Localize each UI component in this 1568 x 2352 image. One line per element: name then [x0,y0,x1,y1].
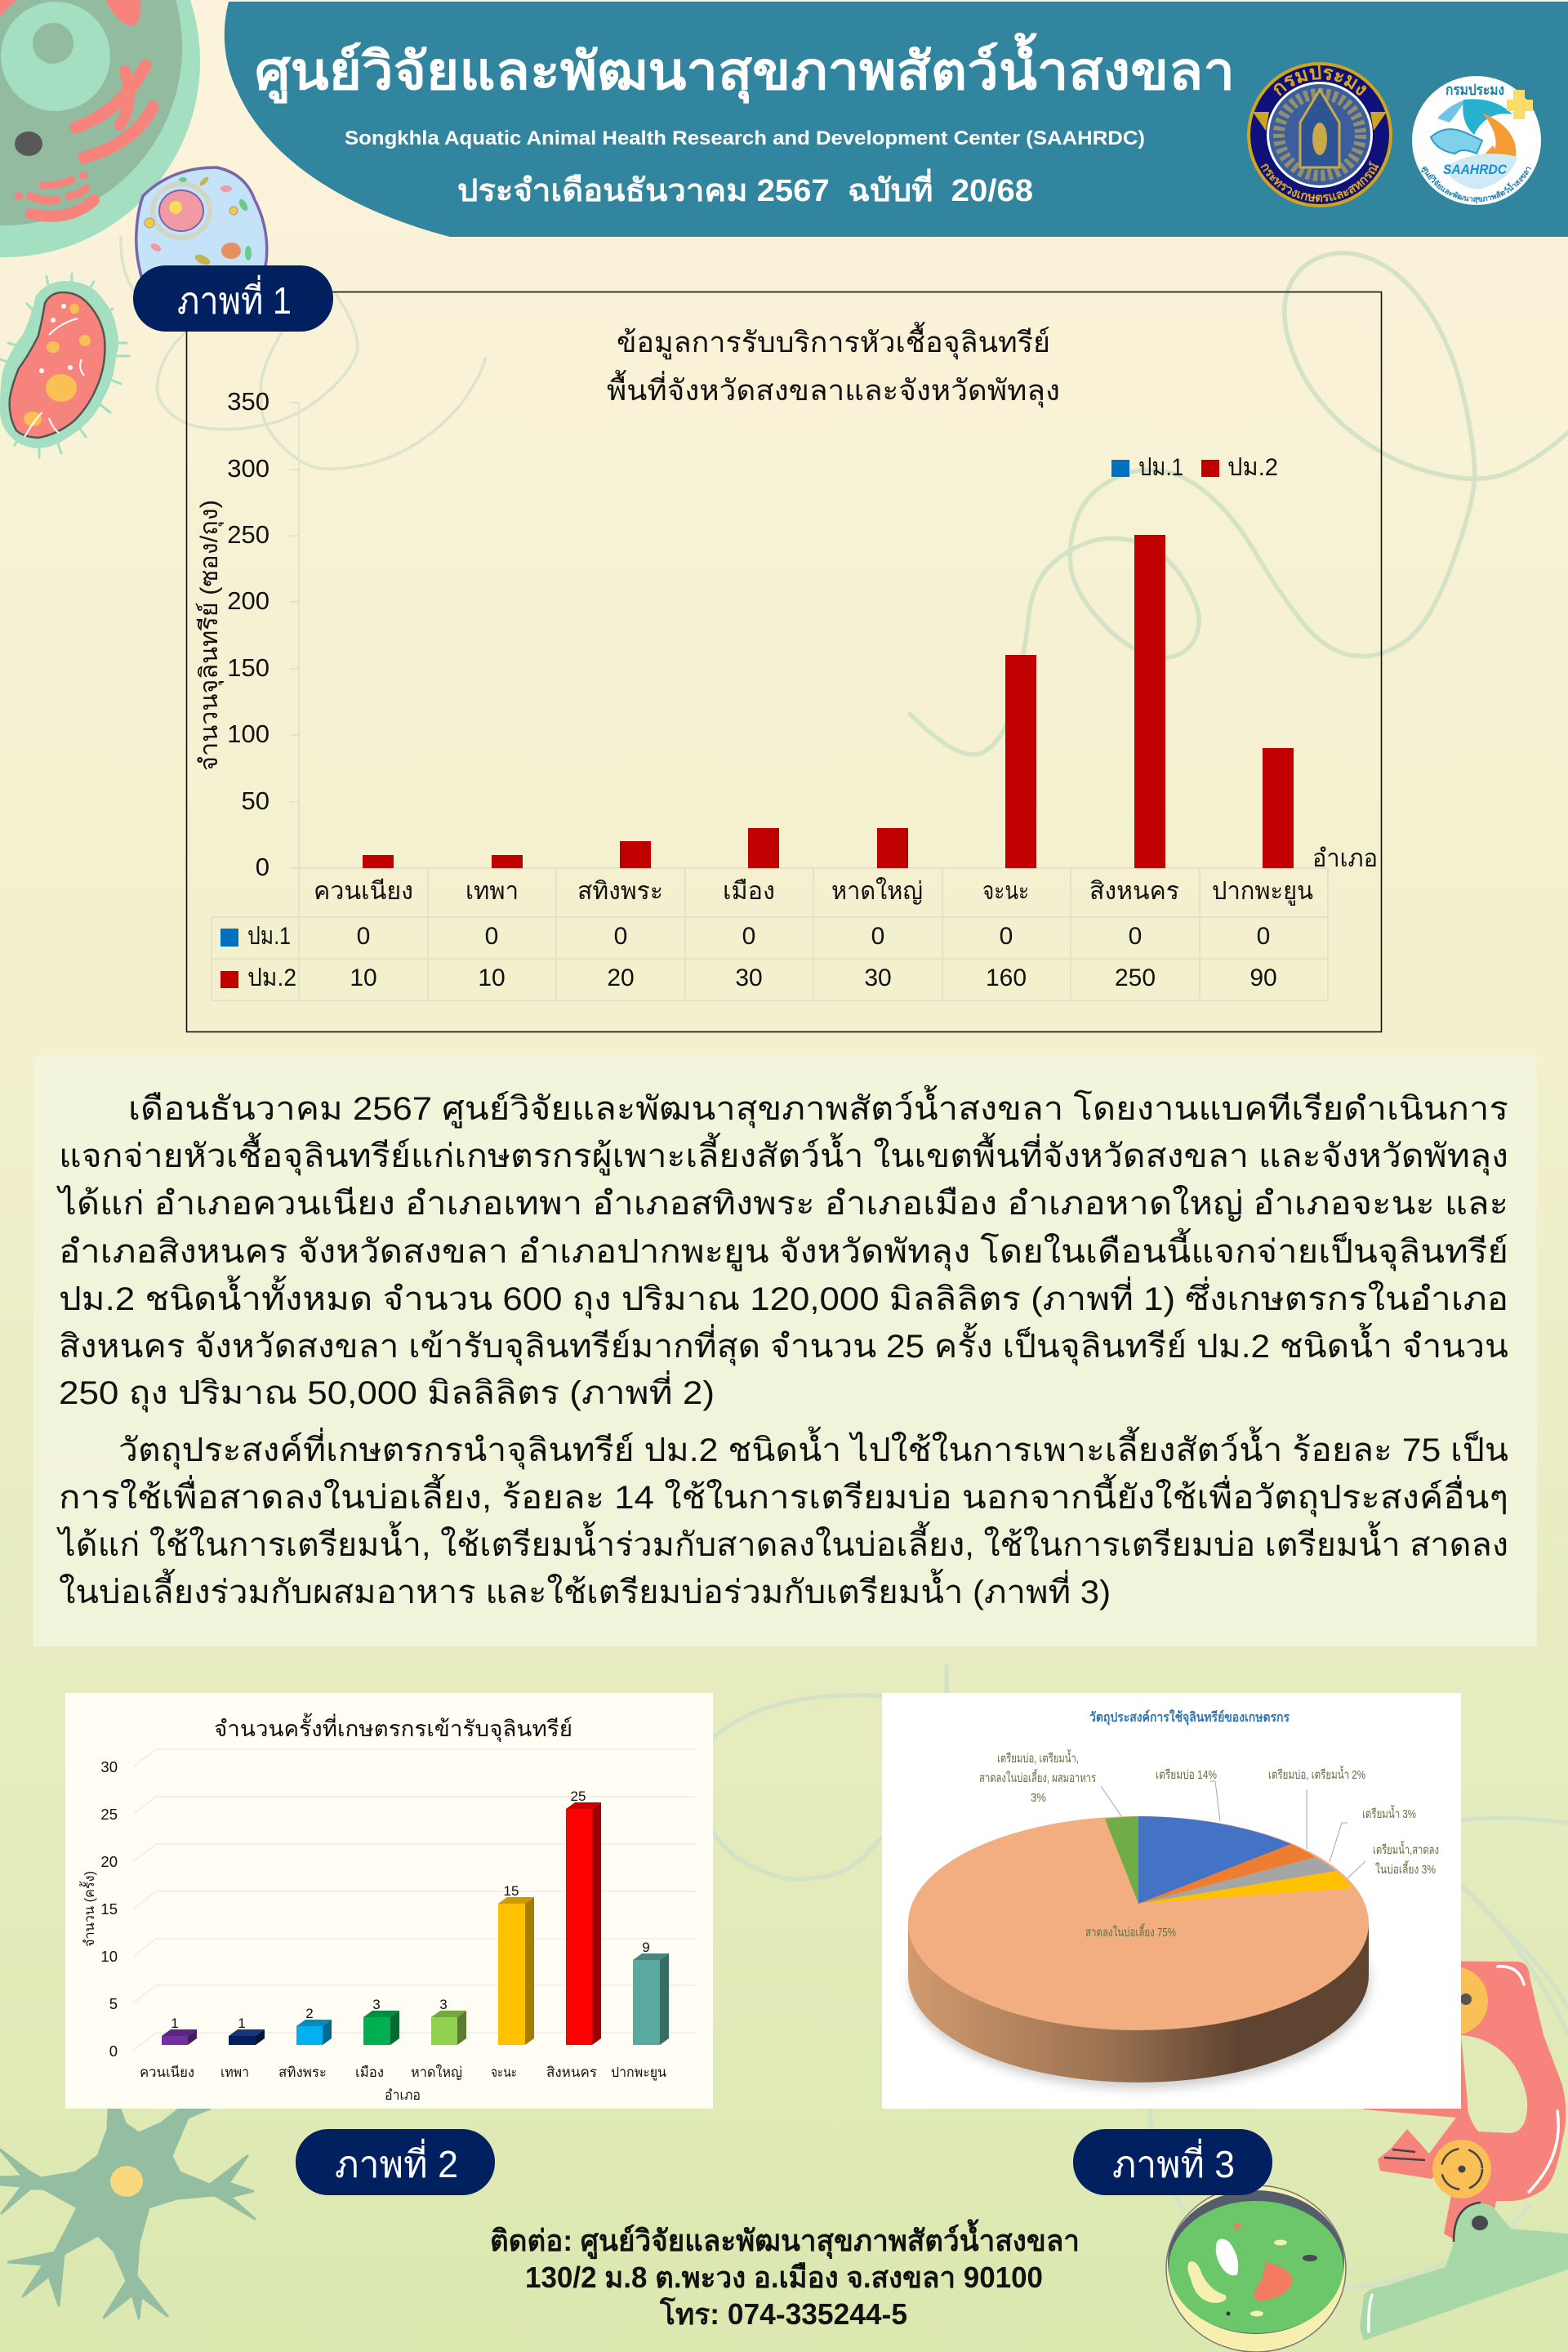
contact information [490,2219,1080,2331]
chart 1 data table: 20 [607,964,635,991]
illustration: blue cell [136,167,267,302]
chart 2 3D bars [162,1802,669,2045]
paragraph 1: เดือนธันวาคม 2567 ศูนย์วิจัยและพัฒนาสุขภาพสัตว์น้ำสงขลา โดยงานแบคทีเรียดำเนินการ [128,1085,1508,1129]
paragraph 1: 250 ถุง ปริมาณ 50,000 มิลลิลิตร (ภาพที่ 2) [59,1370,715,1413]
pie labels: เตรียมบ่อ, เตรียมน้ำ 2% [1268,1766,1365,1782]
chart 2 category labels: สทิงพระ [278,2065,327,2080]
3D pie [908,1816,1370,2089]
chart 2 y axis labels: 20 [100,1853,118,1870]
chart 1 y axis title: จำนวนจุลินทรีย์ (ซอง/ถุง) [195,500,225,771]
chart 1 data table: ควนเนียง [314,878,413,905]
chart 1 data table: ปากพะยูน [1212,878,1313,906]
chart 1 data table: สิงหนคร [1089,878,1179,905]
logo: SAAHRDC: กรมประมง [1446,82,1504,98]
chart 1 data table: จะนะ [982,878,1029,905]
pie labels: เตรียมบ่อ, เตรียมน้ำ, [997,1749,1079,1766]
illustration: petri dish [1166,2185,1346,2352]
logo: Department of Fisheries seal [1247,62,1392,207]
chart 1 y axis labels: 350 [227,387,270,416]
pie labels [979,1749,1439,1940]
chart 2 gridlines [134,1749,696,2050]
label pill: figure 2: ภาพที่ 2 [335,2138,458,2185]
chart 2 category labels [140,2064,666,2103]
label pill: figure 3: ภาพที่ 3 [1112,2138,1235,2185]
paragraph 1: อำเภอสิงหนคร จังหวัดสงขลา อำเภอปากพะยูน จังหวัดพัทลุง โดยในเดือนนี้แจกจ่ายเป็นจุลินทรีย์ [59,1227,1508,1272]
illustration: microscope [1360,1961,1568,2341]
header title: ศูนย์วิจัยและพัฒนาสุขภาพสัตว์น้ำสงขลา [255,33,1235,104]
chart 1 data table [220,877,1313,991]
chart 2 category labels: เมือง [355,2065,384,2080]
paragraph 2: ในบ่อเลี้ยงร่วมกับผสมอาหาร และใช้เตรียมบ่อร่วมกับเตรียมน้ำ (ภาพที่ 3) [59,1568,1111,1610]
chart 2 y axis labels: 0 [109,2042,118,2060]
chart 1 data table: 0 [1000,923,1013,950]
paragraph 2: การใช้เพื่อสาดลงในบ่อเลี้ยง, ร้อยละ 14 ใช้ในการเตรียมบ่อ นอกจากนี้ยังใช้เพื่อวัตถุประสงค์อื่นๆ [59,1473,1508,1517]
paragraph 2: ได้แก่ ใช้ในการเตรียมน้ำ, ใช้เตรียมน้ำร่วมกับสาดลงในบ่อเลี้ยง, ใช้ในการเตรียมบ่อ เตรียมน้ำ สาดลง [56,1521,1508,1563]
paragraph 2: วัตถุประสงค์ที่เกษตรกรนำจุลินทรีย์ ปม.2 ชนิดน้ำ ไปใช้ในการเพาะเลี้ยงสัตว์น้ำ ร้อยละ 75 เป็น [118,1426,1508,1470]
panel: figure 2 chart [65,1693,713,2109]
chart 2 category labels: เทพา [220,2065,249,2080]
chart 1 y axis labels [227,387,270,881]
chart 1 title: พื้นที่จังหวัดสงขลาและจังหวัดพัทลุง [607,369,1060,408]
chart 2 y axis title: จำนวน (ครั้ง) [79,1871,97,1947]
chart 2 y axis labels: 25 [100,1806,118,1823]
chart 2 y axis labels [100,1758,118,2060]
illustration: bacterium [0,274,129,457]
header issue date: ประจำเดือนธันวาคม 2567 ฉบับที่ 20/68 [457,168,1033,208]
chart 2 y axis labels: 15 [100,1900,118,1918]
logo: Department of Fisheries seal: กรมประมง [1274,65,1367,96]
chart 1 data table: เมือง [723,878,775,905]
chart 1 y axis labels: 0 [256,853,270,881]
chart 1 y axis labels: 300 [227,454,270,483]
chart 1 title: ข้อมูลการรับบริการหัวเชื้อจุลินทรีย์ [617,321,1050,359]
pie labels: เตรียมบ่อ 14% [1156,1768,1217,1782]
chart 1 data table: 30 [864,964,892,991]
chart 2 value labels: 1 [238,2016,246,2031]
chart 1 axes and table grid [212,403,1328,1000]
chart 1 data table: ปม.1 [247,923,291,950]
pie labels: เตรียมน้ำ 3% [1362,1805,1416,1821]
chart 1 y axis labels: 200 [227,586,270,615]
chart 1 data table: เทพา [466,878,519,905]
paragraph 2 [56,1426,1508,1610]
chart 1 bars [363,535,1294,868]
panel: figure 1 chart [186,292,1382,1032]
logo: SAAHRDC [1412,76,1541,205]
chart 2 value labels [171,1788,650,2031]
chart 2 value labels: 9 [642,1940,650,1955]
chart 1 data table: 0 [742,923,755,950]
chart 2 value labels: 1 [171,2016,179,2031]
chart 1 y axis labels: 100 [227,719,270,748]
chart 1 legend: ปม.2 [1227,454,1278,481]
chart 2 y axis labels: 5 [109,1995,118,2012]
chart 1 data table: 10 [350,964,377,991]
pie labels: 3% [1031,1791,1046,1805]
header subtitle: Songkhla Aquatic Animal Health Research and Development Center (SAAHRDC) [345,127,1145,149]
chart 1 data table: 0 [1257,923,1270,950]
illustration: neuron [0,2109,255,2319]
chart 3 title: วัตถุประสงค์การใช้จุลินทรีย์ของเกษตรกร [1089,1709,1290,1726]
pie labels: ในบ่อเลี้ยง 3% [1375,1860,1436,1877]
chart 1 legend [1111,454,1278,481]
chart 2 category labels: ปากพะยูน [611,2065,666,2081]
chart 1 y axis labels: 250 [227,520,270,549]
chart 2 category labels: หาดใหญ่ [411,2064,462,2080]
illustration: large cell top-left [0,0,200,257]
paragraph 1 [56,1085,1508,1413]
chart 2 value labels: 3 [439,1997,448,2012]
pie labels: สาดลงในบ่อเลี้ยง 75% [1085,1923,1176,1940]
paragraph 1: แจกจ่ายหัวเชื้อจุลินทรีย์แก่เกษตรกรผู้เพาะเลี้ยงสัตว์น้ำ ในเขตพื้นที่จังหวัดสงขลา และจังหวัดพัทลุง [59,1132,1508,1176]
chart 2 category labels: ควนเนียง [140,2065,194,2080]
paragraph 1: ปม.2 ชนิดน้ำทั้งหมด จำนวน 600 ถุง ปริมาณ 120,000 มิลลิลิตร (ภาพที่ 1) ซึ่งเกษตรกรในอำเภอ [59,1275,1508,1319]
chart 1 data table: 0 [871,923,884,950]
panel: figure 3 pie chart [882,1693,1461,2109]
chart 1 title [607,321,1060,408]
chart 2 value labels: 2 [305,2006,314,2021]
chart 2 category labels: อำเภอ [385,2087,421,2103]
pie leader lines [1101,1781,1365,1878]
chart 2 value labels: 25 [571,1788,586,1804]
logo: SAAHRDC: ศูนย์วิจัยและพัฒนาสุขภาพสัตว์น้ำสงขลา [1421,167,1531,204]
chart 2 category labels: จะนะ [491,2065,517,2080]
chart 2 title: จำนวนครั้งที่เกษตรกรเข้ารับจุลินทรีย์ [214,1713,572,1743]
chart 1 data table: 10 [478,964,506,991]
chart 2 value labels: 15 [504,1883,519,1899]
chart 1 data table: สทิงพระ [577,878,663,905]
chart 1 data table: 250 [1115,964,1156,991]
label pill: figure 2 [296,2129,495,2195]
contact information: โทร: 074-335244-5 [659,2296,907,2331]
header banner [225,2,1568,237]
chart 1 x axis title: อำเภอ [1312,845,1378,872]
pie labels: สาดลงในบ่อเลี้ยง, ผสมอาหาร [979,1769,1096,1785]
chart 1 data table: 0 [1129,923,1142,950]
paragraph 1: ได้แก่ อำเภอควนเนียง อำเภอเทพา อำเภอสทิงพระ อำเภอเมือง อำเภอหาดใหญ่ อำเภอจะนะ และ [56,1184,1508,1222]
chart 2 y axis labels: 10 [100,1948,118,1965]
logo: SAAHRDC: SAAHRDC [1443,162,1508,177]
chart 1 data table: หาดใหญ่ [831,877,923,905]
panel: description text [33,1055,1537,1646]
contact information: 130/2 ม.8 ต.พะวง อ.เมือง จ.สงขลา 90100 [525,2261,1043,2294]
chart 2 category labels: สิงหนคร [546,2065,597,2080]
logo: Department of Fisheries seal: กระทรวงเกษตรและสหกรณ์ [1261,160,1379,203]
chart 1 data table: 90 [1250,964,1277,991]
paragraph 1: สิงหนคร จังหวัดสงขลา เข้ารับจุลินทรีย์มากที่สุด จำนวน 25 ครั้ง เป็นจุลินทรีย์ ปม.2 ชนิดน้ำ จำนวน [59,1322,1508,1366]
chart 2 value labels: 3 [372,1997,381,2012]
label pill: figure 1 [133,265,333,332]
label pill: figure 3 [1073,2129,1272,2195]
chart 1 y axis labels: 150 [227,653,270,682]
chart 1 legend: ปม.1 [1138,454,1183,481]
chart 2 y axis labels: 30 [100,1758,118,1775]
chart 1 data table: 0 [485,923,498,950]
chart 1 data table: 160 [986,964,1027,991]
chart 1 data table: 0 [357,923,370,950]
contact information: ติดต่อ: ศูนย์วิจัยและพัฒนาสุขภาพสัตว์น้ำสงขลา [490,2219,1080,2260]
chart 1 data table: 0 [614,923,627,950]
pie labels: เตรียมน้ำ,สาดลง [1373,1841,1439,1857]
chart 1 y axis labels: 50 [242,786,270,815]
chart 1 data table: 30 [735,964,763,991]
label pill: figure 1: ภาพที่ 1 [177,274,292,322]
chart 1 data table: ปม.2 [247,964,296,991]
